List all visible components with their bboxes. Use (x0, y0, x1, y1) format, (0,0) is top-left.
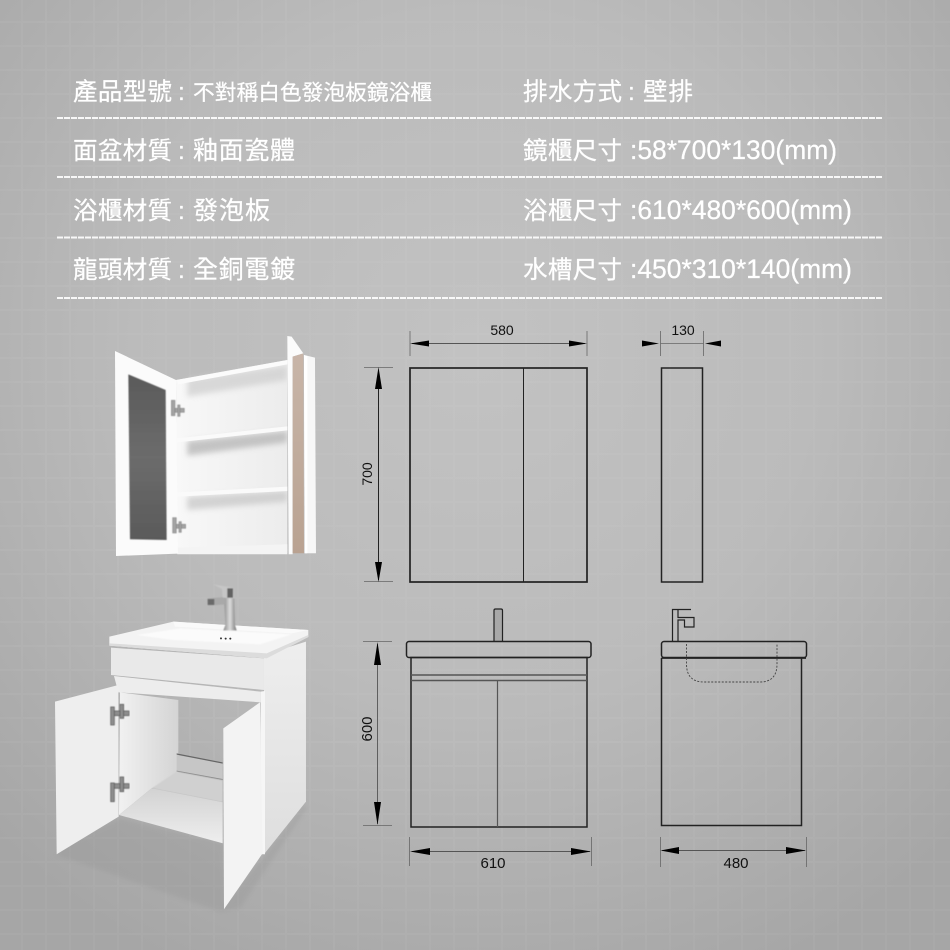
spec: basin material (73, 137, 295, 165)
dimension: 130 depth: 130 (671, 322, 695, 338)
drawing: vanity front (359, 609, 592, 872)
right door edge (287, 336, 316, 554)
drawing: mirror cabinet side (642, 322, 721, 582)
dimension: 130 depth (642, 322, 721, 356)
spec: model: 不對稱白色發泡板鏡浴櫃 (193, 80, 432, 105)
spec: basin material: 面盆材質 (73, 137, 172, 165)
photo: vanity with open doors (55, 584, 308, 912)
dimension: 600 height: 600 (359, 716, 376, 742)
spec: drainage: : (628, 79, 635, 106)
dimension: 480 depth: 480 (723, 855, 749, 872)
spec: model: : (178, 79, 185, 106)
floor shadow (57, 805, 307, 912)
spec: sink size: :450*310*140(mm) (630, 254, 852, 284)
spec: cabinet material (73, 197, 270, 225)
spec: sink size: 水槽尺寸 (523, 256, 622, 284)
photo: open mirror cabinet (115, 336, 316, 556)
dimension: 610 width (410, 837, 592, 872)
faucet (207, 584, 237, 630)
spec: model (73, 78, 432, 106)
spec: basin material: 釉面瓷體 (193, 137, 295, 165)
hinges (111, 704, 129, 802)
spec: faucet material: : (178, 257, 185, 284)
hinges (171, 400, 186, 533)
spec: faucet material (73, 256, 295, 284)
dimension: 700 height (359, 367, 393, 582)
dimension: 480 depth (660, 837, 806, 872)
spec: mirror cabinet size: 鏡櫃尺寸 (523, 137, 622, 165)
spec: cabinet size: 浴櫃尺寸 (523, 197, 622, 225)
right door (223, 702, 263, 909)
spec: cabinet size (523, 195, 852, 225)
ceramic basin (109, 622, 308, 658)
dimension: 580 width (410, 322, 587, 356)
spec: sink size (523, 254, 852, 284)
spec: cabinet material: : (178, 198, 185, 225)
spec: model: 產品型號 (73, 78, 172, 106)
dimension: 700 height: 700 (359, 462, 375, 486)
cabinet body (111, 642, 306, 854)
spec: cabinet size: :610*480*600(mm) (630, 195, 852, 225)
left door (55, 685, 119, 854)
spec: basin material: : (178, 138, 185, 165)
spec: drainage: 排水方式 (523, 78, 622, 106)
spec: cabinet material: 發泡板 (193, 197, 270, 225)
left door with mirror (115, 351, 178, 556)
cabinet interior (176, 360, 287, 554)
spec table (73, 78, 852, 284)
spec: drainage (523, 78, 693, 106)
spec: faucet material: 全銅電鍍 (193, 256, 295, 284)
dimension: 600 height (359, 642, 392, 826)
hidden sink outline (686, 644, 777, 682)
spec: faucet material: 龍頭材質 (73, 256, 172, 284)
drawing: mirror cabinet front (359, 322, 587, 582)
dimension: 580 width: 580 (490, 322, 514, 338)
dimension: 610 width: 610 (480, 855, 506, 872)
spec: mirror cabinet size (523, 135, 837, 165)
spec: drainage: 壁排 (643, 78, 693, 106)
spec: cabinet material: 浴櫃材質 (73, 197, 172, 225)
spec: mirror cabinet size: :58*700*130(mm) (630, 135, 837, 165)
drawing: vanity side (660, 610, 806, 872)
